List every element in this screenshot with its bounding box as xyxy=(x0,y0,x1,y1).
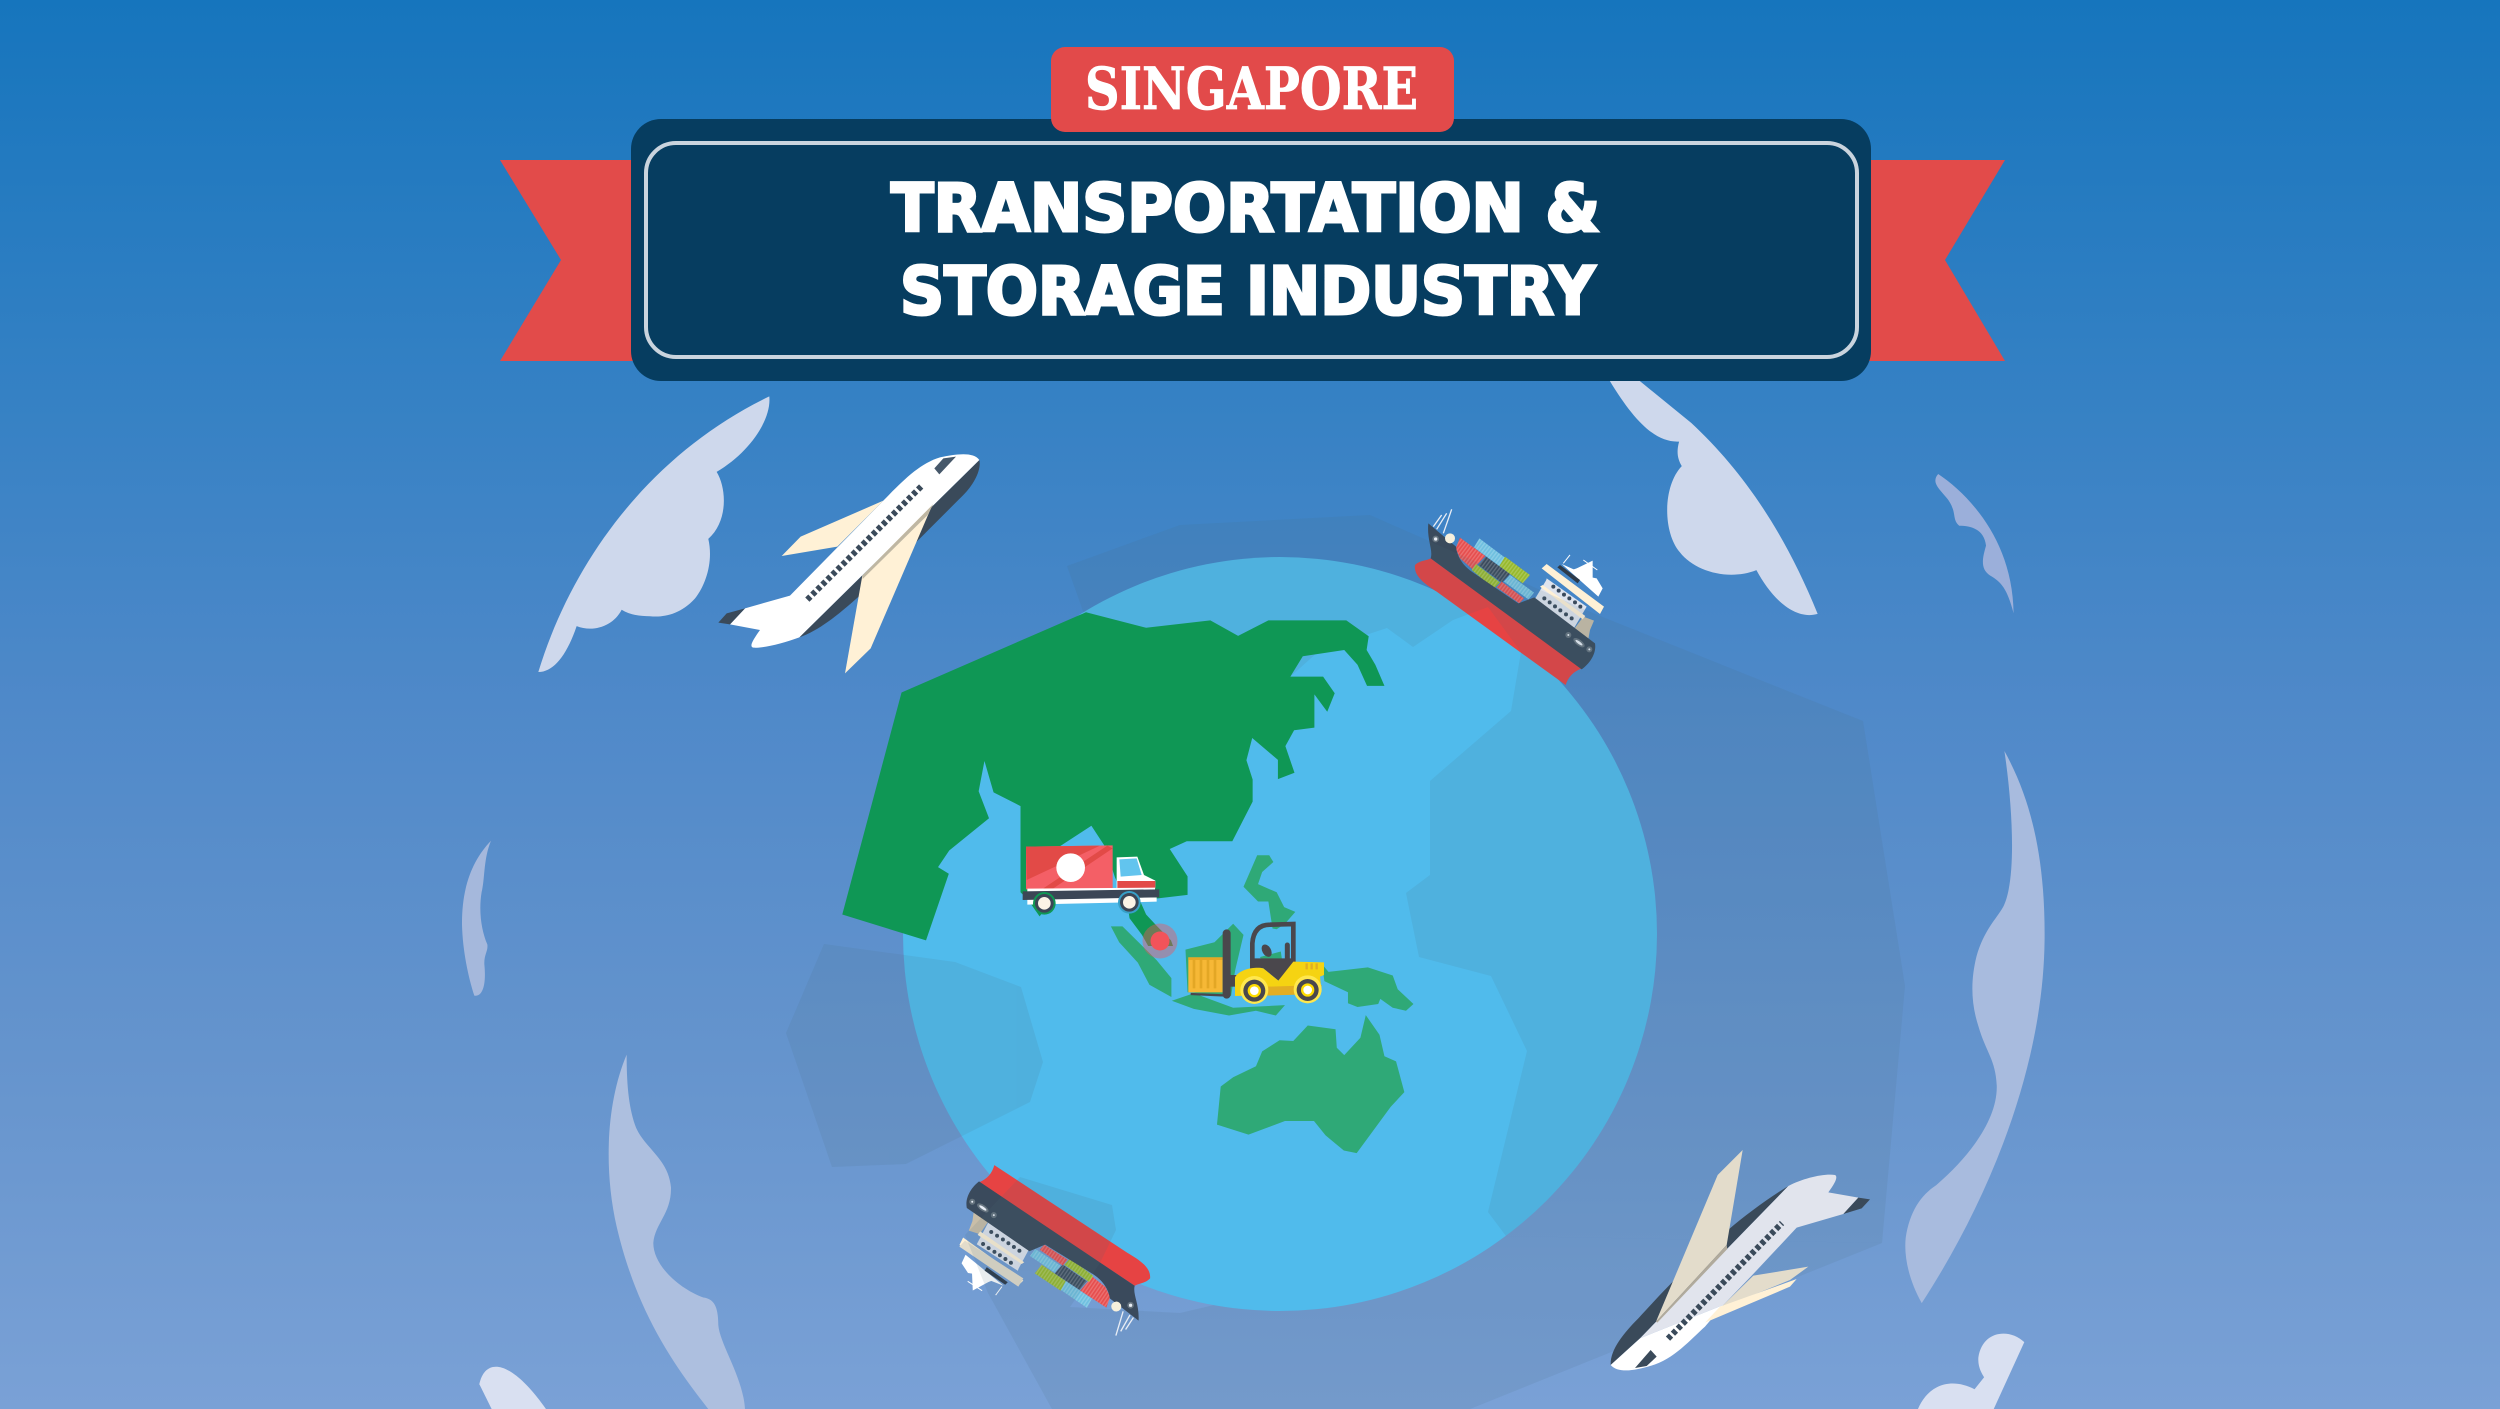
ship: bottom xyxy=(956,1159,1153,1342)
cloud: small left xyxy=(462,841,491,996)
land: Borneo xyxy=(1185,924,1244,996)
globe xyxy=(903,557,1657,1311)
land: Papua xyxy=(1322,964,1413,1011)
truck xyxy=(1023,845,1159,915)
land: Java xyxy=(1172,993,1285,1016)
shadow under globe xyxy=(988,1236,1882,1409)
ribbon: right xyxy=(1840,160,2005,361)
land: Asia xyxy=(842,612,1384,946)
clouds left side xyxy=(462,396,769,1409)
cloud: top left xyxy=(538,396,769,672)
ribbon: left xyxy=(500,160,660,361)
land: Philippines xyxy=(1244,855,1295,929)
title panel xyxy=(631,119,1871,381)
title line 2: STORAGE INDUSTRY xyxy=(900,253,1596,330)
land: Australia xyxy=(1217,1015,1404,1153)
title line 1: TRANSPORTATION & xyxy=(891,170,1600,247)
country tag xyxy=(1051,47,1454,132)
forklift xyxy=(1188,924,1324,1004)
plane: top left xyxy=(718,454,980,673)
cloud: long right xyxy=(1905,751,2045,1303)
clouds right side xyxy=(1603,370,2045,1409)
cloud: bottom right xyxy=(1918,1334,2024,1409)
land: Sulawesi xyxy=(1260,952,1283,970)
country label: SINGAPORE xyxy=(1085,55,1418,123)
plane: bottom right xyxy=(1611,1150,1870,1370)
cloud: top right xyxy=(1603,370,1818,615)
cloud: lower left xyxy=(609,1055,745,1409)
Singapore marker xyxy=(1142,924,1178,958)
title panel inner outline xyxy=(646,143,1857,357)
land: Sumatra xyxy=(1111,926,1171,997)
map: Asia and Australasia xyxy=(842,612,1413,1153)
cloud: small right xyxy=(1935,474,2014,613)
cloud: bottom left xyxy=(479,1367,546,1409)
ship: top right xyxy=(1415,509,1604,685)
shadow continents over globe xyxy=(786,515,1905,1307)
